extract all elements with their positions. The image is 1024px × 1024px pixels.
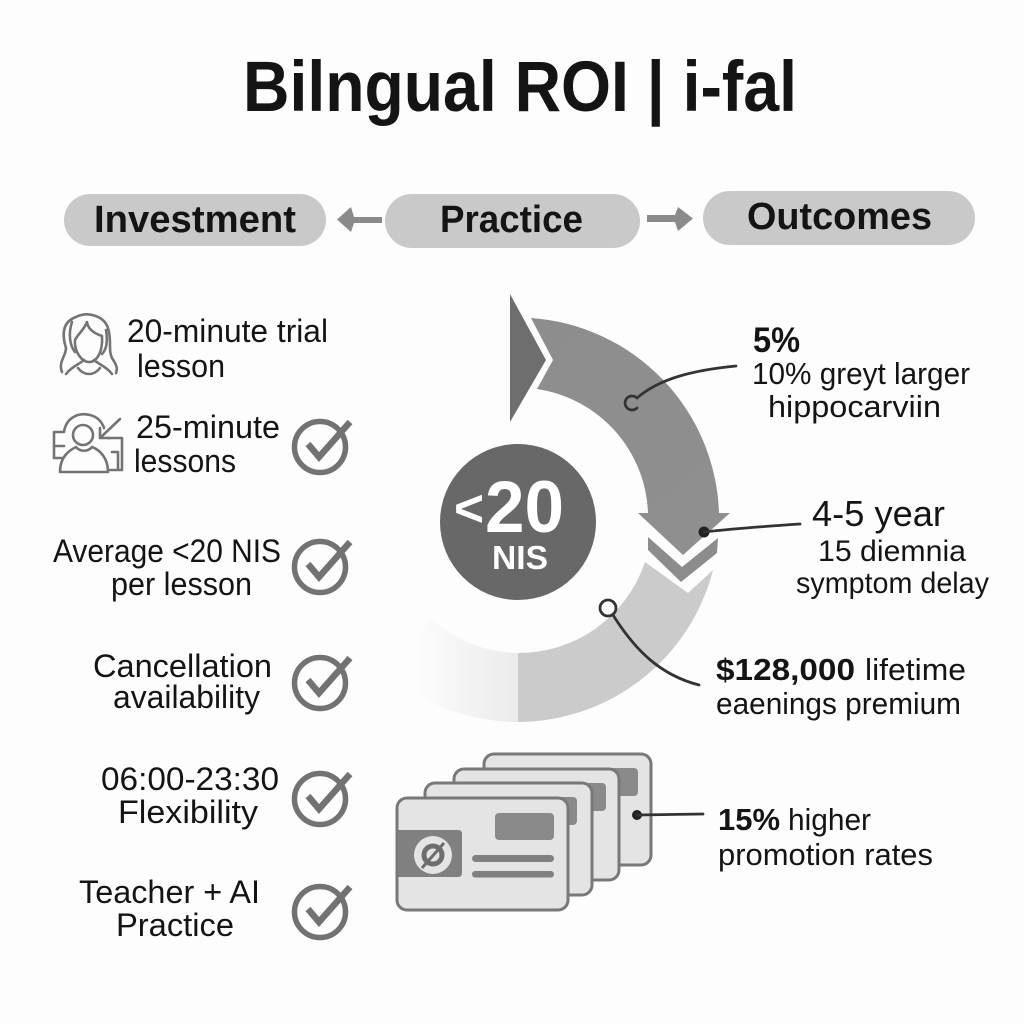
pill: practice <box>385 194 640 248</box>
outcome text: dementia delay: symptom delay <box>796 567 989 600</box>
card 1 <box>397 798 568 910</box>
chevron <box>648 537 718 582</box>
icon: woman <box>61 314 117 374</box>
center badge: NIS <box>492 539 548 576</box>
text: average price: Average <20 NIS <box>53 533 281 569</box>
text: teacher and AI <box>79 874 260 943</box>
arc: light band <box>518 562 713 722</box>
leader: earnings <box>600 600 699 685</box>
outcome text: promotion: 15% <box>718 802 780 837</box>
outcome text: earnings: eaenings premium <box>716 686 961 721</box>
pill: investment: Investment <box>94 199 296 241</box>
arrow: right <box>647 207 693 231</box>
circular flow chart <box>395 294 730 722</box>
text: cancellation: availability <box>113 679 260 715</box>
pill: investment <box>64 194 326 246</box>
text: 25-minute lessons: 25-minute <box>136 409 280 445</box>
text: trial lesson: lesson <box>137 348 225 384</box>
center badge: 20 <box>485 467 564 548</box>
pill: outcomes <box>703 191 975 245</box>
text: 25-minute lessons: lessons <box>134 443 236 479</box>
text: trial lesson: 20-minute trial <box>127 313 328 349</box>
card 2 <box>425 783 592 895</box>
leader: delay <box>698 524 800 538</box>
outcome text: dementia delay: 15 diemnia <box>818 535 966 568</box>
outcome text: hippocampus: hippocarviin <box>768 389 941 424</box>
text: flexibility: 06:00-23:30 <box>101 761 279 797</box>
triangle start marker <box>510 294 546 422</box>
card 4 <box>484 754 651 865</box>
outcome text: hippocampus: 5% <box>753 321 800 360</box>
arc: faded band <box>395 618 518 722</box>
icon: check 2 <box>294 542 350 592</box>
outcome text: dementia delay <box>796 493 989 600</box>
leader: hippocampus <box>625 366 736 410</box>
title: Bilngual ROI | i-fal <box>243 48 797 127</box>
text: average price <box>53 533 281 602</box>
arrow: left <box>337 207 382 232</box>
outcome text: earnings: lifetime <box>865 652 966 687</box>
investment list <box>53 313 350 943</box>
text: trial lesson <box>127 313 328 384</box>
outcome text: hippocampus: 10% greyt larger <box>752 356 970 391</box>
card 3 <box>454 769 619 880</box>
pill: practice: Practice <box>440 199 583 241</box>
text: cancellation: Cancellation <box>93 648 272 684</box>
center badge <box>440 444 596 600</box>
outcome text: dementia delay: 4-5 year <box>812 493 945 534</box>
text: average price: per lesson <box>111 566 252 602</box>
outcome text: promotion: higher <box>788 802 871 837</box>
outcome text: promotion <box>718 802 933 872</box>
leader lines <box>600 366 800 685</box>
stacked cards <box>397 754 651 910</box>
leader: promotion <box>632 810 703 820</box>
icon: check 3 <box>294 658 350 708</box>
flow header: investment, practice, outcomes <box>64 191 975 248</box>
arc arrow: dark band <box>531 318 730 555</box>
outcome text: earnings: $128,000 <box>716 652 855 687</box>
outcome text: earnings <box>716 652 966 721</box>
icon: check 5 <box>294 886 350 938</box>
pill: outcomes: Outcomes <box>747 196 932 238</box>
outcome text: promotion: promotion rates <box>718 837 933 872</box>
outcome text: hippocampus <box>752 321 970 424</box>
text: flexibility: Flexibility <box>118 794 258 830</box>
center badge: < <box>454 480 484 538</box>
icon: check 1 <box>294 422 350 472</box>
text: cancellation <box>93 648 272 715</box>
text: flexibility <box>101 761 279 830</box>
text: teacher and AI: Teacher + AI <box>79 874 260 910</box>
text: 25-minute lessons <box>134 409 280 479</box>
icon: check 4 <box>294 774 350 824</box>
text: teacher and AI: Practice <box>116 907 234 943</box>
icon: person with arrow <box>54 414 122 472</box>
